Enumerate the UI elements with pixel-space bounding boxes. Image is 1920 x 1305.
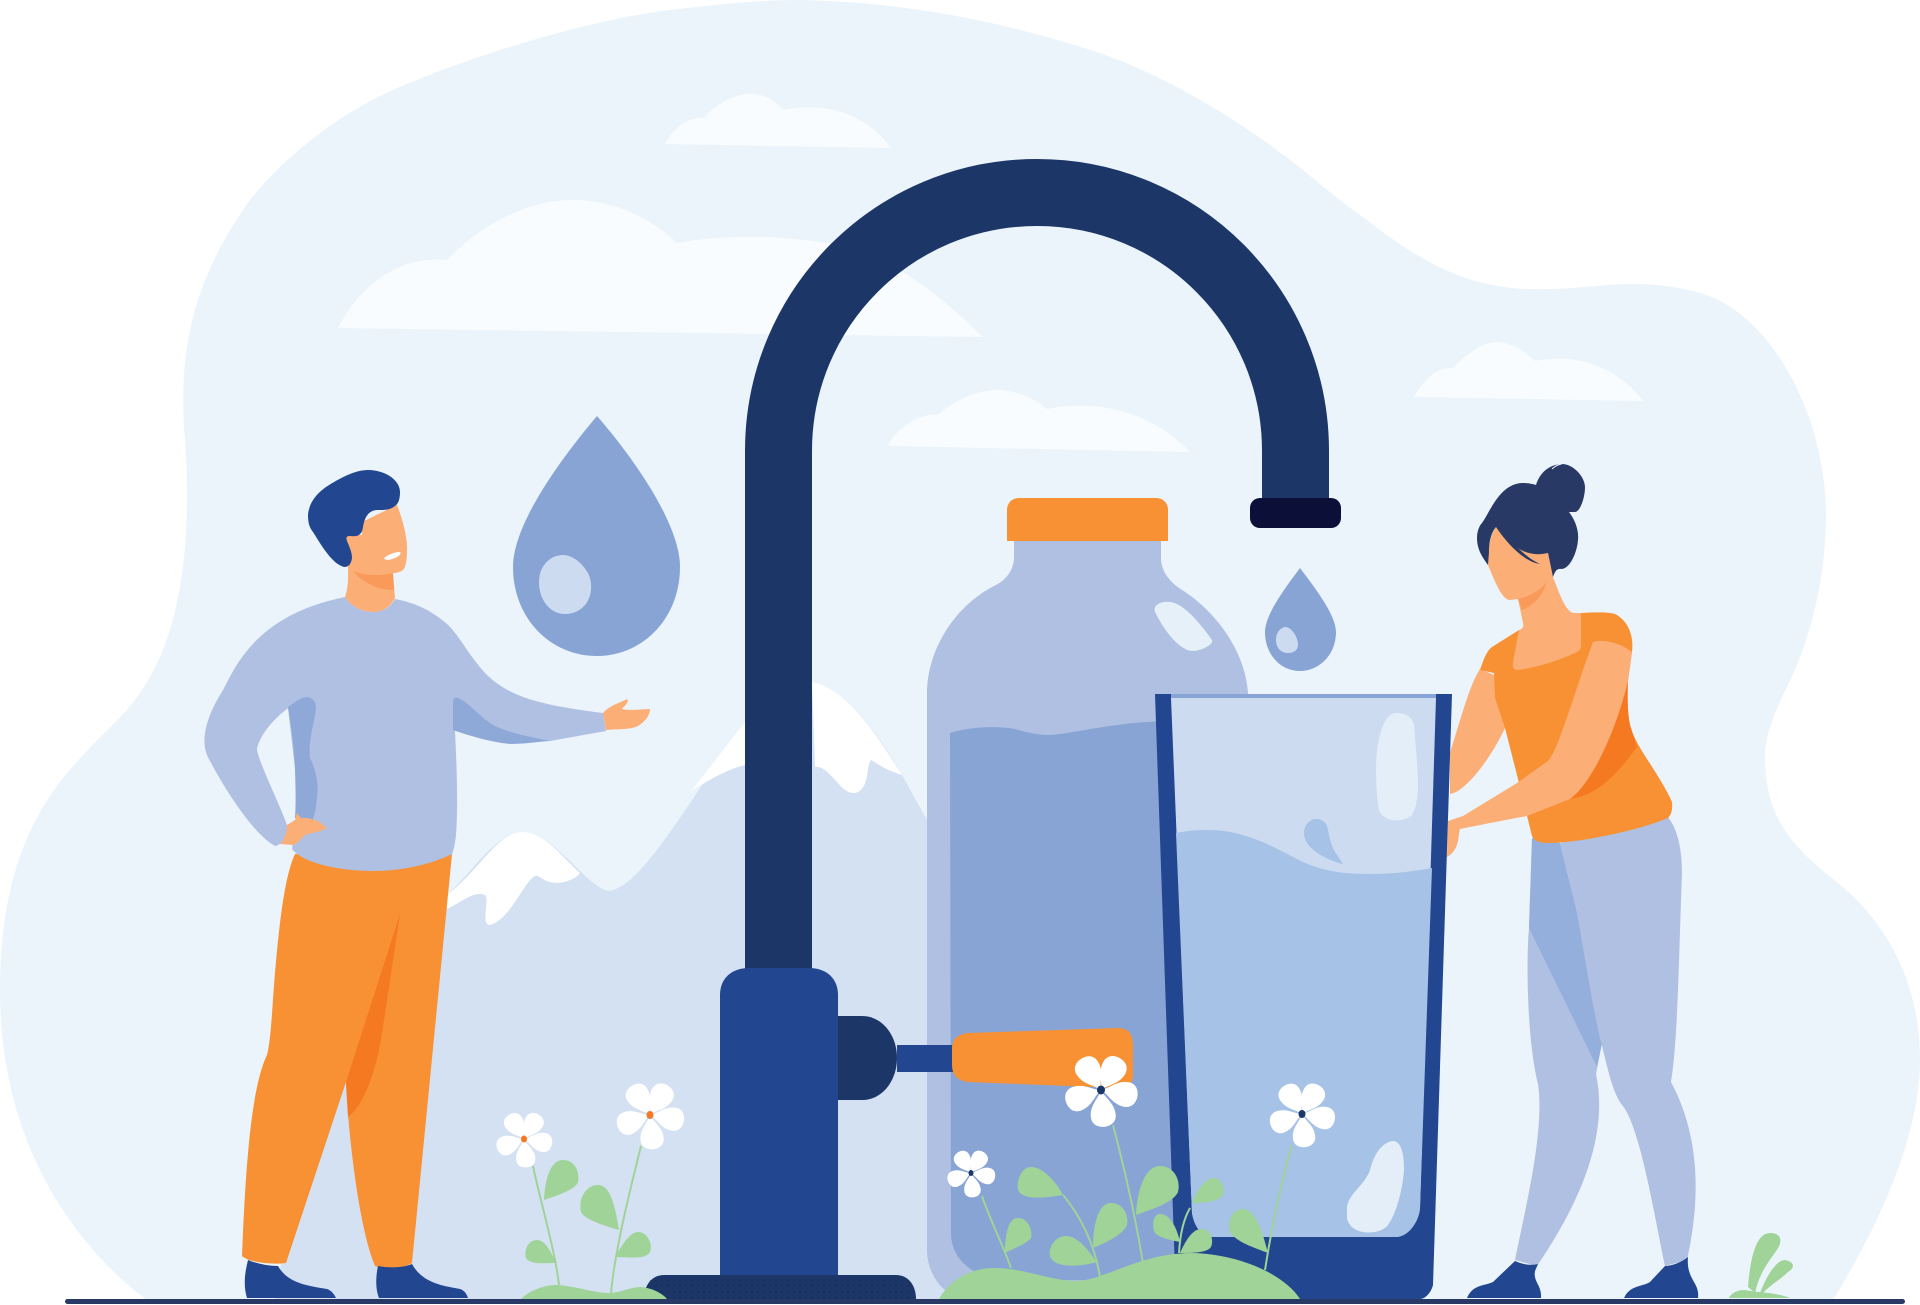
- woman: front leg: [1560, 817, 1696, 1266]
- falling water drop: [1265, 568, 1336, 671]
- man: shoes: [245, 1260, 468, 1298]
- woman: shirt: [1480, 612, 1672, 843]
- man: neck shadow: [353, 571, 394, 590]
- clouds: [338, 94, 1643, 452]
- glass rim: [1171, 694, 1436, 698]
- flower blossoms: [494, 1080, 686, 1168]
- glass frame: [1155, 694, 1452, 1299]
- plant stems: [533, 1146, 641, 1293]
- faucet: [644, 192, 1341, 1299]
- woman: near arm: [1447, 641, 1632, 857]
- glass of water: [1155, 694, 1452, 1299]
- man: mouth: [384, 552, 401, 560]
- man: head and neck: [345, 505, 407, 612]
- ground line: [65, 1299, 1905, 1304]
- man: inner sleeve right: [453, 698, 550, 744]
- woman: hair highlight: [1552, 462, 1570, 469]
- glass empty part: [1171, 698, 1436, 1237]
- woman: hair: [1477, 464, 1585, 577]
- woman: [1447, 462, 1698, 1298]
- glass highlights: [1304, 713, 1418, 1233]
- man: inner sleeve left: [288, 697, 318, 821]
- large water drop: [513, 416, 680, 656]
- woman: shirt shadow: [1570, 681, 1637, 799]
- plant leaves: [939, 1166, 1300, 1299]
- flower blossoms: [945, 1052, 1337, 1198]
- flowers and plants: left group: [494, 1080, 686, 1299]
- man: left hand: [280, 813, 327, 845]
- woman: head and neck: [1488, 527, 1581, 670]
- woman: leg shadow: [1529, 838, 1602, 1067]
- man: [204, 470, 650, 1298]
- man: pants: [242, 854, 452, 1268]
- woman: neck shadow: [1518, 581, 1547, 610]
- woman: rear leg: [1515, 838, 1602, 1266]
- flowers and plants: centre group: [939, 1052, 1337, 1299]
- glass water: [1176, 830, 1432, 1237]
- man: hair: [308, 470, 400, 567]
- mountains: [275, 682, 1000, 1300]
- man: sweater: [204, 597, 606, 871]
- plant leaves: [521, 1160, 667, 1299]
- man: pants shadow: [346, 914, 400, 1117]
- small plant right: [1729, 1233, 1793, 1298]
- woman: shoes: [1467, 1257, 1698, 1298]
- bottle: [927, 498, 1248, 1299]
- woman: far arm: [1450, 669, 1505, 794]
- plant stems: [982, 1125, 1292, 1277]
- man: right hand: [603, 699, 650, 730]
